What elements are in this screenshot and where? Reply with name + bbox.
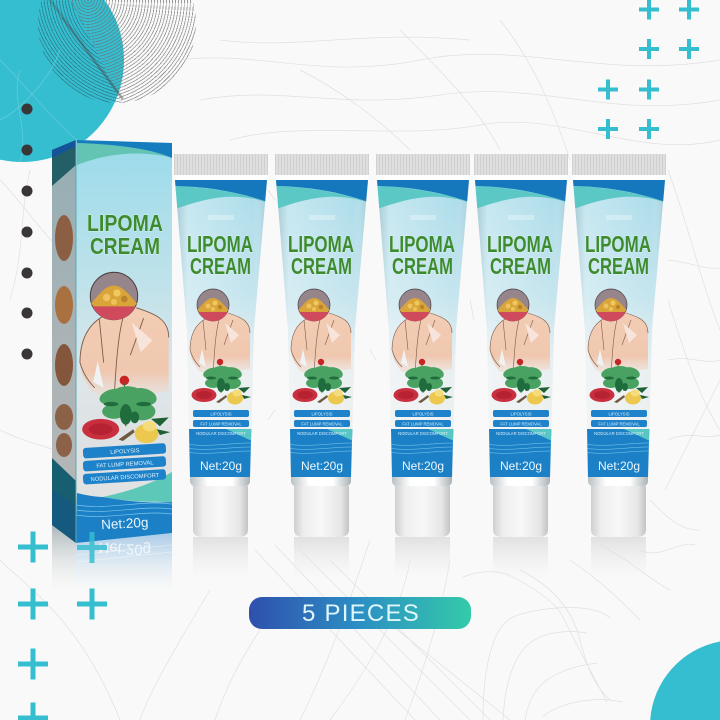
- tube 1: [170, 154, 270, 579]
- box feature pills: NODULAR DISCOMFORT: [90, 473, 160, 483]
- tube 2: LIPOLYSIS: [311, 412, 333, 416]
- tube 4: FAT LUMP REMOVAL: [500, 422, 542, 426]
- tube 1: CREAM: [190, 253, 251, 279]
- tube 2: [271, 154, 371, 579]
- tube 3: NODULAR DISCOMFORT: [398, 431, 448, 436]
- box net weight: Net:20g: [101, 515, 149, 532]
- teal circle top left: [0, 0, 124, 162]
- tube 3: [372, 154, 472, 579]
- box feature pills: LIPOLYSIS: [110, 448, 140, 456]
- box feature pills: FAT LUMP REMOVAL: [96, 460, 154, 470]
- tube 2: NODULAR DISCOMFORT: [297, 431, 347, 436]
- tube 5: [568, 154, 668, 579]
- tube 5: LIPOMA: [585, 231, 651, 257]
- box title: [87, 210, 163, 259]
- tube 5: FAT LUMP REMOVAL: [598, 422, 640, 426]
- tube 4: NODULAR DISCOMFORT: [496, 431, 546, 436]
- plus icons bottom left: [18, 532, 107, 720]
- box title: CREAM: [90, 233, 160, 259]
- tube 1: FAT LUMP REMOVAL: [200, 422, 242, 426]
- tube 4: [470, 154, 570, 579]
- tube 2: CREAM: [291, 253, 352, 279]
- tube 2: LIPOMA: [288, 231, 354, 257]
- tube 1: NODULAR DISCOMFORT: [196, 431, 246, 436]
- tube 1: Net:20g: [200, 459, 242, 473]
- tube 2: FAT LUMP REMOVAL: [301, 422, 343, 426]
- tube 1: LIPOMA: [187, 231, 253, 257]
- product box: [52, 140, 172, 592]
- hatched circle: [38, 0, 196, 103]
- badge: 5 pieces: [249, 597, 471, 629]
- box side panel: [52, 140, 76, 543]
- box artwork: back and herbs: [80, 272, 170, 443]
- tube 4: LIPOLYSIS: [510, 412, 532, 416]
- tube 5: LIPOLYSIS: [608, 412, 630, 416]
- tube 3: LIPOLYSIS: [412, 412, 434, 416]
- hatched circle dark diagonal streak: [50, 0, 122, 98]
- tube 4: CREAM: [490, 253, 551, 279]
- teal circle bottom right: [650, 642, 720, 720]
- tube 3: LIPOMA: [389, 231, 455, 257]
- box front panel: [76, 140, 172, 543]
- tube 1: LIPOLYSIS: [210, 412, 232, 416]
- tube 5: NODULAR DISCOMFORT: [594, 431, 644, 436]
- tube 3: FAT LUMP REMOVAL: [402, 422, 444, 426]
- dots column: [22, 104, 32, 360]
- tube 3: CREAM: [392, 253, 453, 279]
- box reflection: Net:20g: [98, 539, 151, 558]
- tube 3: Net:20g: [402, 459, 444, 473]
- tube 4: LIPOMA: [487, 231, 553, 257]
- box feature pills: [83, 443, 166, 485]
- plus icons top right: [598, 0, 699, 139]
- box title: LIPOMA: [87, 210, 163, 236]
- tube 2: Net:20g: [301, 459, 343, 473]
- box reflection: [52, 525, 172, 592]
- faint mesh on teal circle: [0, 50, 90, 162]
- tube 5: Net:20g: [598, 459, 640, 473]
- tube 4: Net:20g: [500, 459, 542, 473]
- tube 5: CREAM: [588, 253, 649, 279]
- badge: 5 pieces: 5 PIECES: [302, 600, 421, 627]
